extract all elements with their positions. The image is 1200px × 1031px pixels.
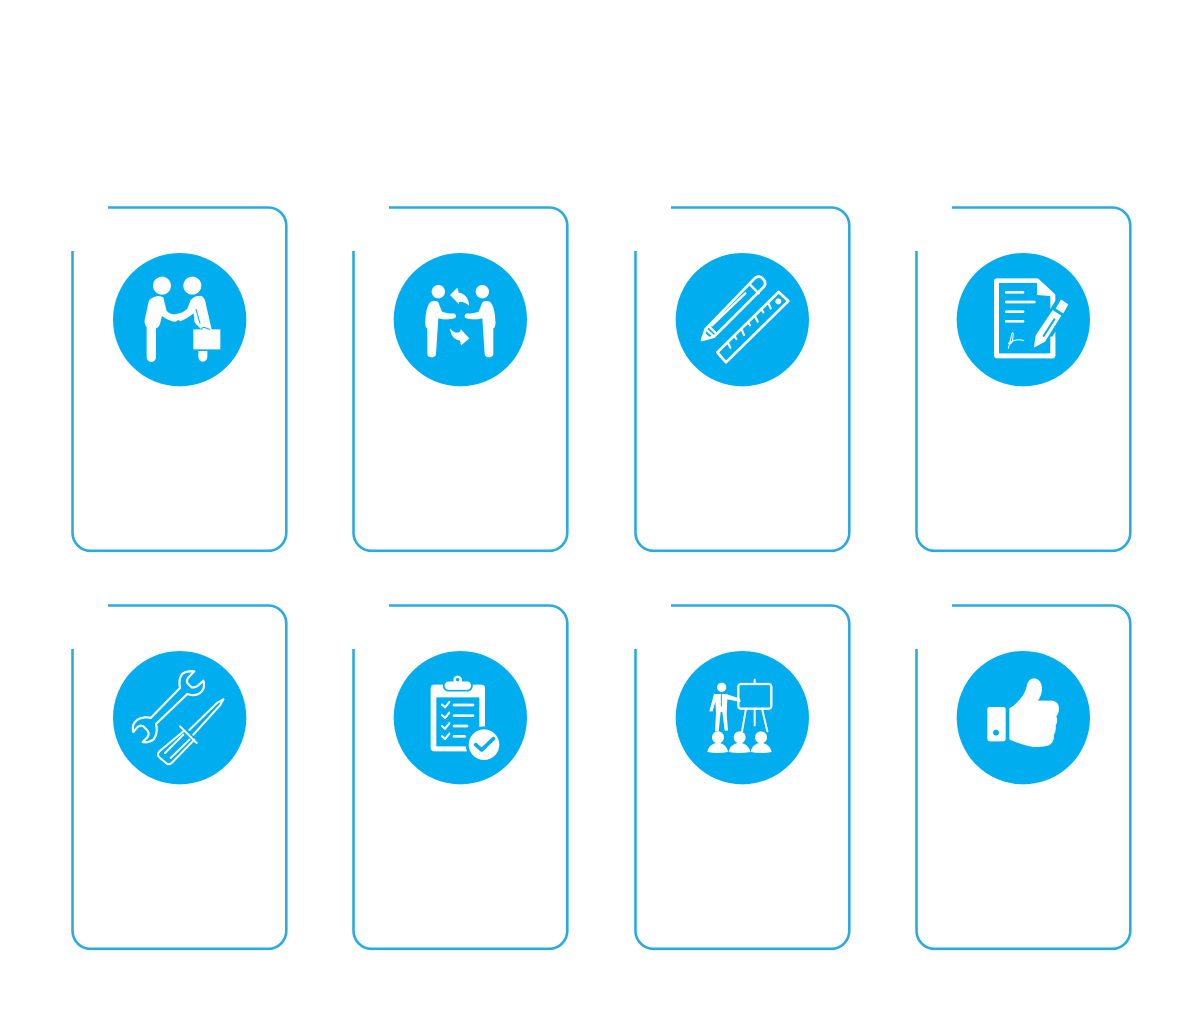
card outline 7 — [636, 606, 849, 949]
panel: card 2 exchange — [354, 208, 567, 551]
panel: card 4 signed document — [916, 208, 1130, 551]
card outline 4 — [916, 208, 1130, 551]
panel: card 7 presentation — [636, 606, 849, 949]
card outline 2 — [354, 208, 567, 551]
card outline 1 — [72, 208, 286, 551]
icon: handshake with briefcase — [113, 253, 246, 386]
card outline 5 — [72, 606, 286, 949]
panel: card 8 thumbs up — [916, 606, 1130, 949]
card outline 8 — [916, 606, 1130, 949]
card outline 6 — [354, 606, 567, 949]
icon: two people exchanging — [394, 253, 527, 386]
icon: presenter and audience — [676, 651, 809, 784]
icon: signed document — [957, 253, 1090, 386]
panel: card 6 checklist — [354, 606, 567, 949]
card outline 3 — [636, 208, 849, 551]
icon: clipboard checklist — [394, 651, 527, 784]
panel: card 5 tools — [72, 606, 286, 949]
panel: card 3 pencil and ruler — [636, 208, 849, 551]
icon: thumbs up — [957, 651, 1090, 784]
icon: pencil and ruler — [676, 253, 809, 386]
icon: wrench and screwdriver — [113, 651, 246, 784]
panel: card 1 handshake — [72, 208, 286, 551]
